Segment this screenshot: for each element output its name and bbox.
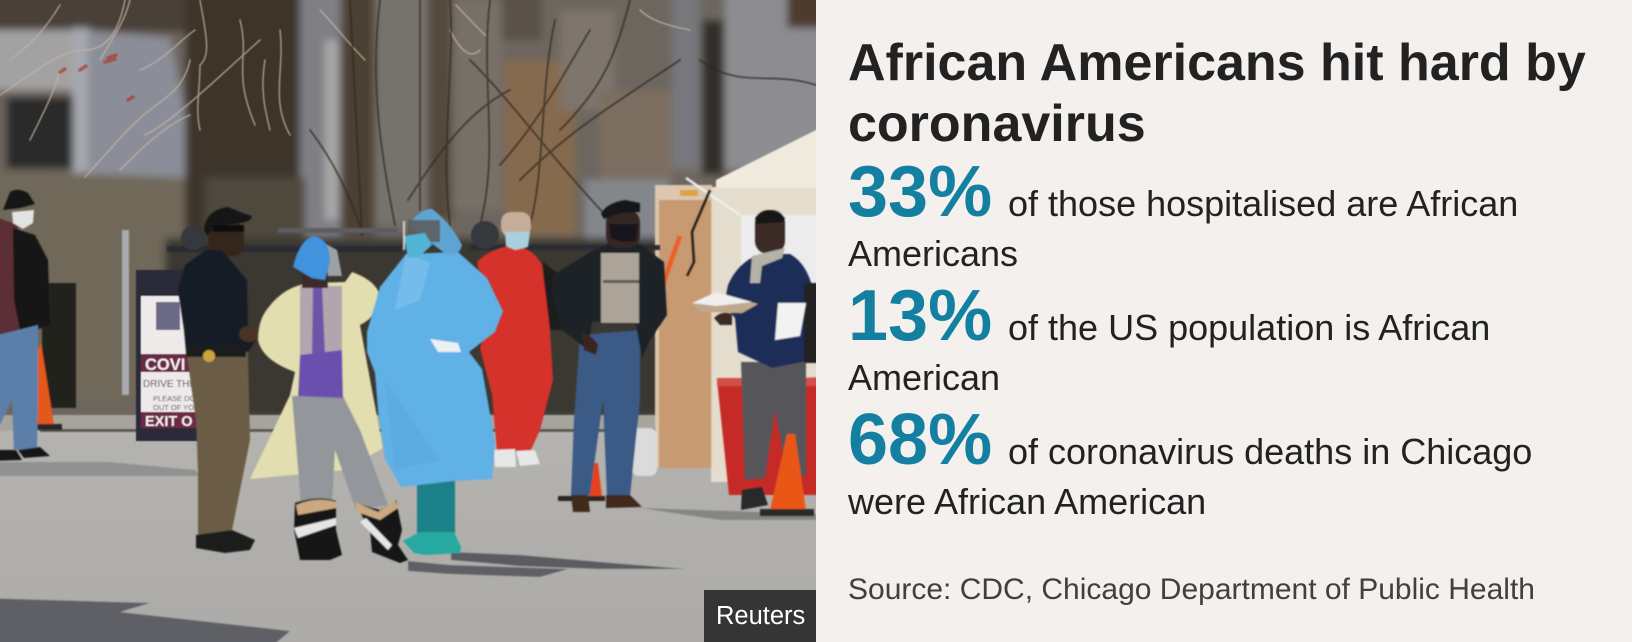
stat: 33% bbox=[848, 152, 1518, 274]
road and sidewalk bbox=[0, 415, 840, 642]
stat: 68% bbox=[848, 400, 1532, 522]
stat: 13%: of the US population is African bbox=[1008, 307, 1490, 348]
stat: 33%: of those hospitalised are African bbox=[1008, 183, 1518, 224]
man in leather jacket bbox=[552, 200, 667, 512]
road sign: EXIT O bbox=[145, 414, 193, 430]
road sign: DRIVE THRU bbox=[143, 379, 204, 390]
person in red bbox=[477, 212, 565, 467]
road sign: OUT OF YOU bbox=[153, 403, 199, 412]
stat: 13%: American bbox=[848, 357, 1000, 398]
person in yellow gown bbox=[250, 236, 408, 563]
stat: 13% bbox=[848, 276, 1490, 398]
person in blue gown bbox=[367, 209, 503, 555]
officer in dark shirt and olive trousers bbox=[178, 207, 259, 553]
stat: 33%: 33% bbox=[848, 152, 992, 232]
red waste bins bbox=[717, 377, 836, 495]
road sign: PLEASE DO bbox=[153, 394, 196, 403]
background: houses and trees bbox=[0, 0, 840, 430]
background figure on left edge bbox=[0, 190, 76, 461]
title: African Americans hit hard by bbox=[848, 34, 1586, 92]
panel: photo of coronavirus testing site bbox=[0, 0, 816, 642]
road sign bbox=[136, 270, 204, 441]
woman with clipboard bbox=[692, 210, 824, 516]
fence detail bbox=[122, 221, 660, 395]
stat: 68%: 68% bbox=[848, 400, 992, 480]
road sign: COVI bbox=[145, 356, 185, 374]
title bbox=[848, 34, 1586, 153]
stat: 68%: of coronavirus deaths in Chicago bbox=[1008, 431, 1532, 472]
background: bare tree branches bbox=[0, 0, 816, 235]
stat: 33%: Americans bbox=[848, 233, 1018, 274]
stat: 13%: 13% bbox=[848, 276, 992, 356]
tent bbox=[655, 120, 836, 482]
photo credit: Reuters bbox=[704, 590, 816, 642]
title: coronavirus bbox=[848, 95, 1146, 153]
source note: Source: CDC, Chicago Department of Public Health bbox=[848, 573, 1535, 606]
panel: statistics text bbox=[816, 0, 1632, 642]
photo credit: Reuters: Reuters bbox=[716, 602, 805, 630]
stat: 68%: were African American bbox=[848, 481, 1206, 522]
